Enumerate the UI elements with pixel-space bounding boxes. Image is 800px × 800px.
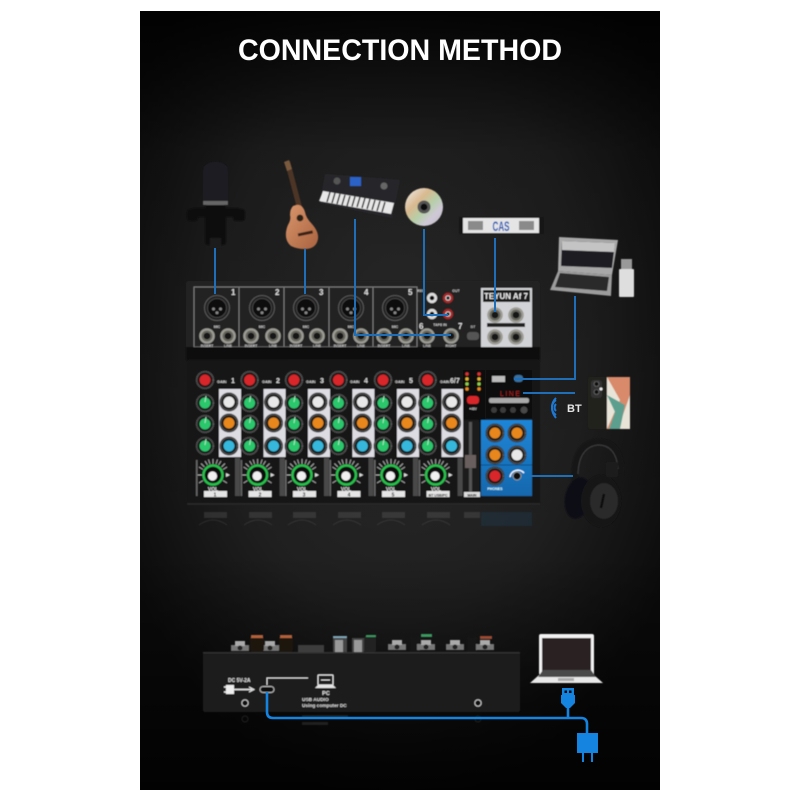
strip number labels: 4	[348, 492, 351, 498]
strip labels: GAIN	[306, 380, 316, 384]
channel labels: INSERT	[290, 344, 303, 348]
strip labels	[217, 378, 460, 385]
icon: headphones	[561, 442, 621, 527]
blue effects panel: PHONES	[487, 487, 503, 491]
channel strips	[196, 370, 464, 497]
channel numbers: 2	[275, 288, 280, 297]
icon: USB plug	[561, 688, 575, 708]
PC icon and label	[315, 675, 336, 697]
strip labels: 1	[231, 378, 235, 385]
main fader: MAIN	[468, 494, 477, 498]
USB audio text	[302, 697, 347, 709]
volume labels	[208, 487, 441, 493]
back top connectors	[231, 634, 494, 652]
channel labels: MIC	[303, 325, 310, 329]
strip labels: GAIN	[395, 380, 405, 384]
strip labels: 2	[276, 378, 280, 385]
strip number labels: 1	[214, 492, 217, 498]
icon: acoustic guitar	[284, 160, 318, 249]
bluetooth label: BT	[567, 403, 582, 415]
strip number labels: 2	[259, 492, 262, 498]
mixer back view	[203, 634, 520, 712]
strip labels: 5	[409, 378, 413, 385]
icon: smartphone	[588, 377, 630, 429]
channel numbers: 4	[364, 288, 369, 297]
channel labels: LINE	[269, 344, 278, 348]
strip number labels: 6/7 USB/PC	[428, 494, 448, 498]
icon: power amplifier: CAS	[492, 218, 510, 234]
strip labels: 3	[320, 378, 324, 385]
volume labels: VOL	[431, 487, 441, 493]
title: CONNECTION METHOD	[238, 34, 562, 67]
volume labels: VOL	[208, 487, 218, 493]
volume labels: VOL	[297, 487, 307, 493]
LED and phantom section: +48V	[469, 407, 478, 411]
volume labels: VOL	[253, 487, 263, 493]
channel labels: LINE	[423, 344, 432, 348]
channel labels	[201, 289, 461, 348]
channel labels: MIC	[348, 325, 355, 329]
PC icon and label: PC	[322, 691, 330, 697]
volume labels: VOL	[386, 487, 396, 493]
USB audio text: USB AUDIO	[302, 697, 329, 703]
mixer reflection	[199, 512, 532, 526]
channel labels: INSERT	[334, 344, 347, 348]
strip labels: GAIN	[262, 380, 272, 384]
back view reflection	[242, 715, 481, 725]
icon: power adapter	[577, 733, 598, 762]
strip number labels	[214, 492, 448, 498]
channel labels: LINE	[313, 344, 322, 348]
channel numbers: 7	[458, 322, 463, 331]
icon: laptop front	[530, 634, 603, 683]
channel labels: MIC	[259, 325, 266, 329]
tape RCA sockets	[427, 293, 453, 319]
icon: studio microphone	[187, 162, 245, 248]
blue effects panel	[481, 420, 532, 496]
USB bluetooth display panel	[486, 370, 532, 418]
main fader	[463, 420, 480, 498]
channel labels: LINE	[402, 344, 411, 348]
channel labels: MIC	[214, 325, 221, 329]
volume labels: VOL	[341, 487, 351, 493]
channel numbers: 6	[419, 322, 424, 331]
channel numbers: 3	[319, 288, 324, 297]
blue power cable and plugs	[267, 688, 598, 762]
mixer rear top panel	[186, 281, 540, 360]
connection lines: top row devices	[215, 219, 575, 476]
channel labels: RIGHT	[446, 344, 457, 348]
background panel	[140, 11, 660, 790]
channel labels: LINE	[357, 344, 366, 348]
strip labels: GAIN	[350, 380, 360, 384]
channel labels: INSERT	[245, 344, 258, 348]
USB-C port and label line	[260, 678, 308, 692]
icon: power amplifier	[459, 217, 544, 234]
strip labels: GAIN	[440, 380, 450, 384]
channel labels: MIC	[392, 325, 399, 329]
icon: electronic keyboard	[319, 174, 400, 218]
USB BT switch	[467, 324, 479, 340]
strip labels: 6/7	[450, 378, 460, 385]
USB bluetooth display panel: LINE	[500, 391, 520, 398]
channel numbers: 5	[408, 288, 413, 297]
USB BT switch: BT	[470, 324, 476, 329]
DC label and plug: DC 5V-2A	[228, 678, 251, 684]
strip labels: GAIN	[217, 380, 227, 384]
strip labels: 4	[364, 378, 368, 385]
mixer front body	[187, 360, 540, 505]
channel numbers: 1	[231, 288, 236, 297]
LED and phantom section	[463, 370, 485, 422]
channel labels: REC	[417, 289, 425, 293]
channel numbers	[231, 288, 463, 331]
icon: laptop with USB stick	[550, 237, 634, 297]
screw feet	[242, 700, 481, 706]
channel labels: INSERT	[201, 344, 214, 348]
channel labels: INSERT	[378, 344, 391, 348]
DC label and plug	[224, 678, 254, 694]
strip number labels: 3	[303, 492, 306, 498]
brand panel	[481, 288, 532, 347]
brand panel: TEYUN Af 7	[484, 291, 528, 301]
strip number labels: 5	[392, 492, 395, 498]
channel labels: TAPE IN	[433, 323, 447, 327]
channel labels: OUT	[452, 289, 461, 293]
channel labels: LINE	[224, 344, 233, 348]
channel jacks and XLR sockets	[199, 296, 459, 344]
icon: compact disc	[405, 188, 443, 226]
icon: bluetooth waves	[552, 398, 556, 418]
USB audio text: Using computer DC	[302, 703, 347, 709]
